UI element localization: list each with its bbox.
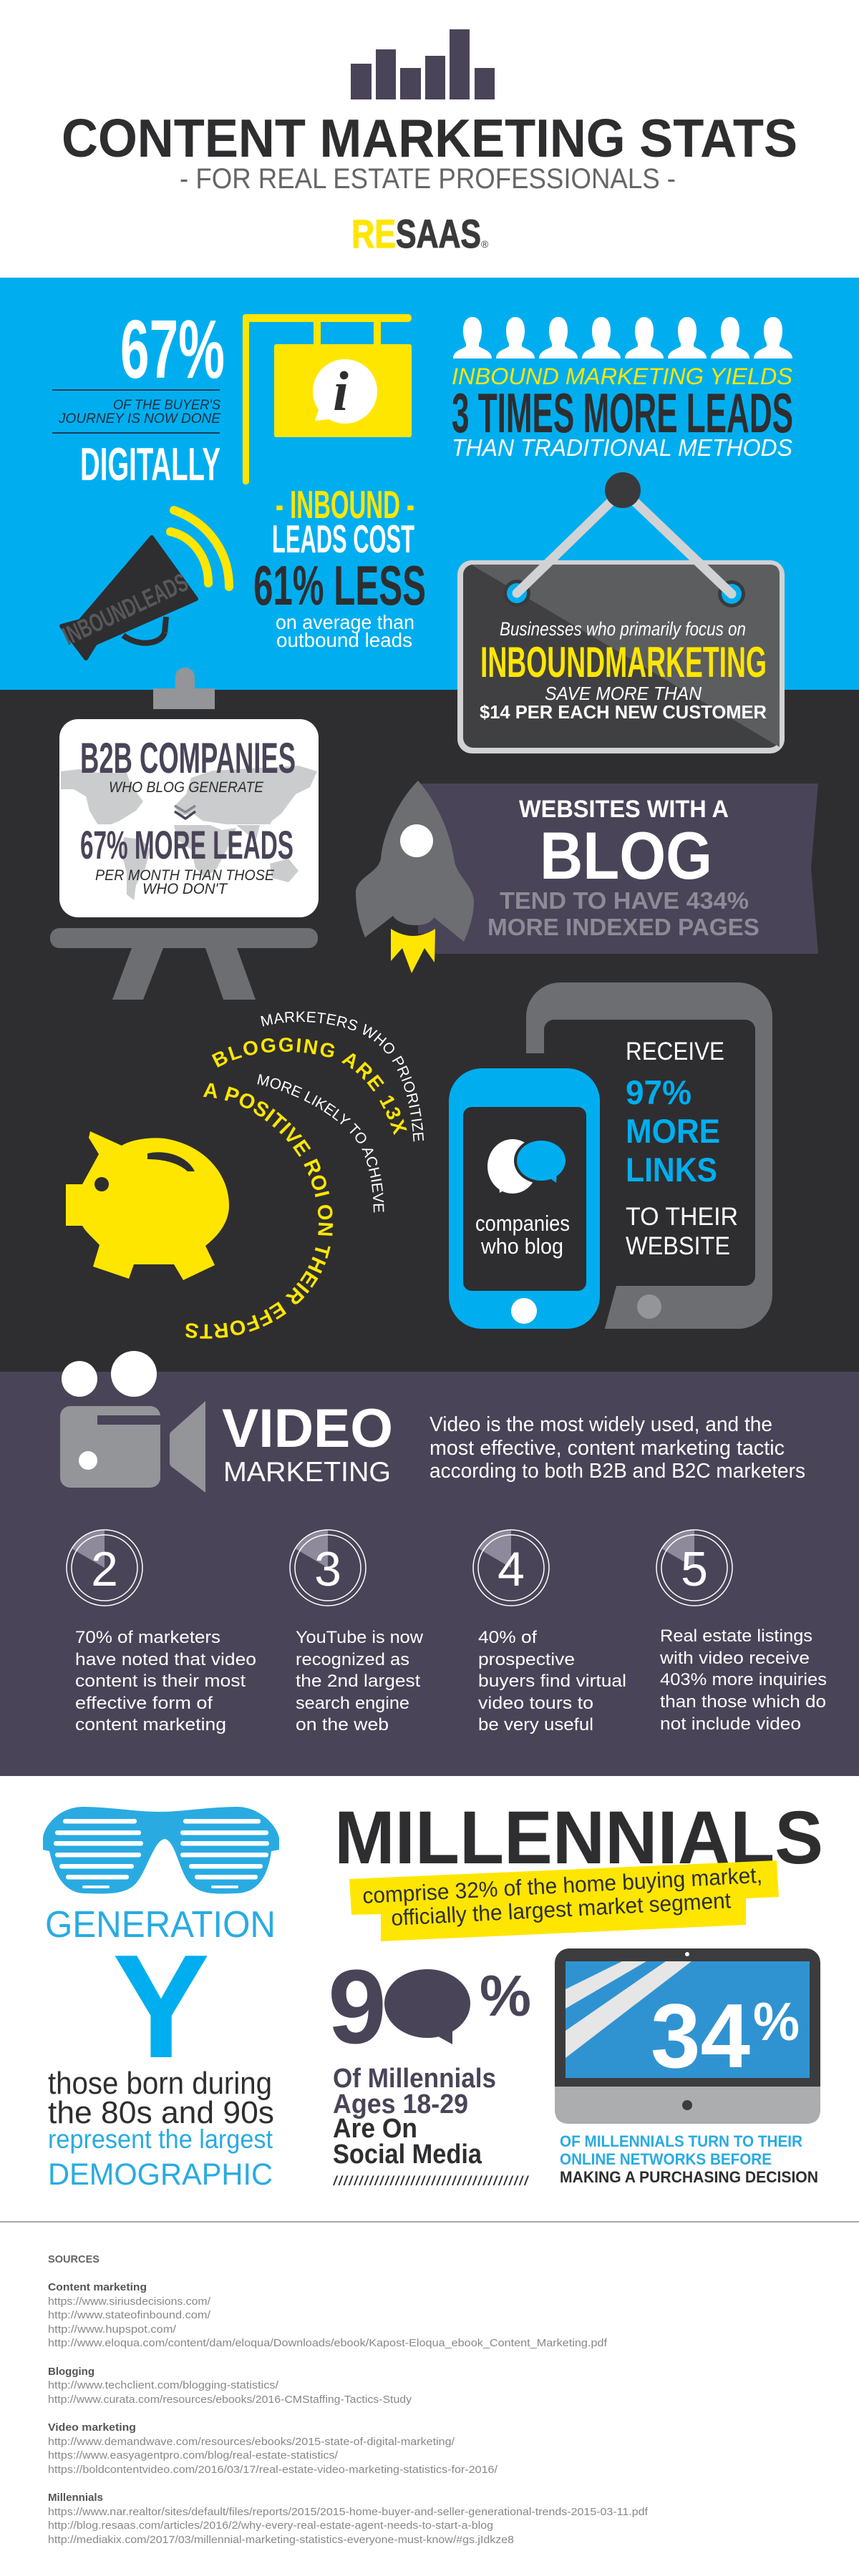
sources: content marketing: http://www.stateofinbound.com/ xyxy=(48,2309,211,2321)
text: b2b companies: B2B COMPANIES xyxy=(80,734,296,782)
countdown: 3: search engine xyxy=(296,1694,409,1713)
text: generation y xyxy=(45,1904,276,2192)
countdown: 2: content marketing xyxy=(75,1715,226,1735)
stat: inbound leads cost 61% less: 61% LESS xyxy=(253,554,426,617)
stat: 67% digitally: JOURNEY IS NOW DONE xyxy=(58,411,220,426)
banner: websites with a blog: BLOG xyxy=(540,818,712,893)
sources: content marketing: http://www.hupspot.com/ xyxy=(48,2323,177,2336)
countdown: 2 xyxy=(67,1530,256,1735)
text: receive 97% more links: WEBSITE xyxy=(626,1232,730,1260)
text: video intro xyxy=(430,1413,805,1483)
logo: RESAAS: SAAS xyxy=(396,211,481,256)
heading: millennials: MILLENNIALS xyxy=(334,1796,823,1880)
sources: millennials: http://blog.resaas.com/articles/2016/2/why-every-real-estate-agent-needs-to-start-a-blog xyxy=(48,2519,493,2532)
countdown: 3: YouTube is now xyxy=(296,1628,424,1647)
text: online networks: ONLINE NETWORKS BEFORE xyxy=(560,2150,772,2168)
countdown: 5 xyxy=(656,1530,827,1734)
countdown: 3: on the web xyxy=(296,1715,389,1735)
stat: 67% digitally: OF THE BUYER'S xyxy=(113,398,220,413)
countdown: 4: prospective xyxy=(478,1650,575,1669)
countdown: 5: with video receive xyxy=(659,1649,810,1668)
sources: video marketing: https://www.easyagentpro.com/blog/real-estate-statistics/ xyxy=(48,2449,339,2462)
countdown: 3: the 2nd largest xyxy=(296,1672,420,1691)
icon: rocket xyxy=(356,781,474,973)
header xyxy=(62,29,797,256)
sources: blogging: http://www.techclient.com/blogging-statistics/ xyxy=(48,2379,279,2391)
icon: desktop monitor xyxy=(555,1948,820,2124)
callout: yellow banner: comprise 32% of the home buying market, xyxy=(362,1863,763,1908)
text: online networks: MAKING A PURCHASING DECISION xyxy=(560,2168,818,2186)
heading: sources: SOURCES xyxy=(48,2253,100,2265)
text: video intro: according to both B2B and B2C marketers xyxy=(430,1460,805,1483)
icon: bar chart xyxy=(351,29,495,99)
text: generation y: those born during xyxy=(48,2066,272,2101)
text: receive 97% more links: MORE xyxy=(626,1112,720,1150)
stat: 3 times more leads: INBOUND MARKETING YIELDS xyxy=(452,364,792,389)
sources: blogging: Blogging xyxy=(48,2366,94,2378)
countdown: 4: 40% of xyxy=(478,1628,537,1647)
hanging sign: inbound marketing: SAVE MORE THAN xyxy=(545,683,702,704)
stat: 90% social media: Ages 18-29 xyxy=(333,2089,468,2119)
icon: megaphone xyxy=(58,510,229,658)
banner: websites with a blog xyxy=(418,784,818,954)
sources: video marketing: https://boldcontentvideo.com/2016/03/17/real-estate-video-marketing-statistics-for-2016/ xyxy=(48,2464,498,2476)
sources: blogging: http://www.curata.com/resources/ebooks/2016-CMStaffing-Tactics-Study xyxy=(48,2394,412,2406)
text: b2b companies: WHO BLOG GENERATE xyxy=(109,779,264,796)
panel: video marketing xyxy=(0,1351,859,1776)
callout: yellow banner xyxy=(349,1860,779,1941)
stat: 90% social media: Of Millennials xyxy=(333,2064,496,2094)
countdown: 4: 4 xyxy=(498,1542,525,1596)
countdown: 5: not include video xyxy=(660,1714,801,1734)
panel: millennials xyxy=(43,1796,823,2192)
text: online networks xyxy=(560,2132,818,2186)
stat: inbound leads cost 61% less: outbound leads xyxy=(276,629,412,651)
icon: desktop monitor: 34 xyxy=(651,1985,750,2087)
panel: content marketing (blue) xyxy=(0,278,859,690)
panel: sources xyxy=(48,2253,649,2546)
heading: video marketing xyxy=(222,1398,393,1488)
sources: content marketing: Content marketing xyxy=(48,2281,147,2293)
text: video intro: most effective, content marketing tactic xyxy=(430,1437,785,1460)
text: b2b companies xyxy=(80,734,296,897)
sources: millennials xyxy=(48,2492,649,2546)
icon: smartphone xyxy=(449,1068,600,1329)
hanging sign: inbound marketing: Businesses who primarily focus on xyxy=(500,618,746,640)
banner: websites with a blog: WEBSITES WITH A xyxy=(519,796,729,823)
countdown: 2: have noted that video xyxy=(75,1650,256,1669)
text: generation y: the 80s and 90s xyxy=(48,2095,274,2130)
stat: 90% social media: Social Media xyxy=(333,2140,482,2170)
stat: 3 times more leads: THAN TRADITIONAL METHODS xyxy=(452,434,792,461)
icon: desktop monitor: % xyxy=(753,1991,800,2051)
sources: blogging xyxy=(48,2366,412,2406)
icon: smartphone: companies xyxy=(475,1211,570,1236)
sources: content marketing: http://www.eloqua.com/content/dam/eloqua/Downloads/ebook/Kapost-Eloqua_ebook_Content_Marketing.pdf xyxy=(48,2337,608,2349)
icon: smartphone: who blog xyxy=(480,1234,563,1259)
countdown: 5: than those which do xyxy=(660,1692,826,1712)
countdown: 5: Real estate listings xyxy=(660,1626,812,1646)
countdown: 2: 2 xyxy=(91,1542,118,1596)
stat: inbound leads cost 61% less: on average than xyxy=(276,611,414,633)
countdown: 2: 70% of marketers xyxy=(75,1628,220,1647)
text: generation y: GENERATION xyxy=(45,1904,276,1946)
text: online networks: OF MILLENNIALS TURN TO THEIR xyxy=(560,2132,802,2150)
text: b2b companies: WHO DON'T xyxy=(142,881,228,897)
countdown: 3: recognized as xyxy=(296,1650,409,1669)
sources: content marketing: https://www.siriusdecisions.com/ xyxy=(48,2296,211,2308)
text: video intro: Video is the most widely used, and the xyxy=(430,1413,772,1436)
icon: video camera xyxy=(60,1351,205,1493)
icon: piggy bank xyxy=(66,1131,229,1280)
icon: tablet xyxy=(523,982,772,1331)
sources: millennials: https://www.nar.realtor/sites/default/files/reports/2015/2015-home-buyer-and-seller-generational-trends-2015-03-11.pdf xyxy=(48,2506,649,2518)
countdown: 2: effective form of xyxy=(75,1694,213,1713)
stat: 67% digitally: 67% xyxy=(120,303,225,396)
curved text: marketers who prioritize blogging: MORE LIKELY TO ACHIEVE xyxy=(257,1074,384,1212)
icon: shutter glasses xyxy=(43,1807,279,1893)
text: receive 97% more links: RECEIVE xyxy=(626,1038,724,1065)
countdown: 4: video tours to xyxy=(478,1694,593,1713)
icon: speech bubbles xyxy=(487,1138,568,1194)
sources: video marketing: Video marketing xyxy=(48,2421,136,2434)
title: CONTENT MARKETING STATS xyxy=(62,108,797,168)
curved text: marketers who prioritize blogging xyxy=(185,1012,424,1339)
stat: 90% social media: ////////////////////////////////////// xyxy=(333,2174,529,2188)
text: generation y: DEMOGRAPHIC xyxy=(48,2157,273,2192)
curved text: marketers who prioritize blogging: MARKETERS WHO PRIORITIZE xyxy=(261,1012,424,1142)
logo: RESAAS: ® xyxy=(481,238,489,250)
text: generation y: represent the largest xyxy=(48,2124,273,2154)
sources: video marketing xyxy=(48,2421,498,2476)
sources: millennials: Millennials xyxy=(48,2492,103,2504)
icon: hanging info sign xyxy=(243,314,412,484)
callout: yellow banner: officially the largest market segment xyxy=(391,1888,732,1931)
banner: websites with a blog: MORE INDEXED PAGES xyxy=(487,914,759,940)
countdown: 2: content is their most xyxy=(75,1672,246,1691)
text: receive 97% more links xyxy=(626,1038,738,1260)
countdown: 5: 403% more inquiries xyxy=(660,1670,827,1689)
banner: websites with a blog: TEND TO HAVE 434% xyxy=(500,887,749,914)
countdown: 4: buyers find virtual xyxy=(478,1672,626,1691)
panel: blogging (dark) xyxy=(0,668,859,1372)
countdown: 3: 3 xyxy=(314,1542,341,1596)
stat: inbound leads cost 61% less xyxy=(253,482,426,651)
stat: 90% social media: % xyxy=(480,1964,531,2029)
curved text: marketers who prioritize blogging: A POSITIVE ROI ON THEIR EFFORTS xyxy=(185,1083,334,1339)
hanging sign: inbound marketing: $14 PER EACH NEW CUSTOMER xyxy=(480,701,767,723)
text: b2b companies: 67% MORE LEADS xyxy=(80,822,293,867)
text: receive 97% more links: TO THEIR xyxy=(626,1203,738,1231)
logo: RESAAS: RE xyxy=(351,211,396,256)
stat: inbound leads cost 61% less: - INBOUND - xyxy=(276,482,414,527)
countdown: 4 xyxy=(473,1530,626,1735)
logo: RESAAS xyxy=(351,211,489,256)
text: receive 97% more links: 97% xyxy=(626,1073,691,1111)
heading: video marketing: VIDEO xyxy=(222,1398,393,1459)
icon: hanging info sign: i xyxy=(333,360,349,422)
countdown: 5: 5 xyxy=(681,1542,708,1596)
curved text: marketers who prioritize blogging: BLOGGING ARE 13X xyxy=(212,1038,407,1135)
heading: video marketing: MARKETING xyxy=(223,1457,391,1488)
text: b2b companies: PER MONTH THAN THOSE xyxy=(95,867,275,884)
countdown: 4: be very useful xyxy=(478,1715,593,1735)
stat: 67% digitally: DIGITALLY xyxy=(80,438,220,490)
subtitle: - FOR REAL ESTATE PROFESSIONALS - xyxy=(180,163,676,195)
icon: row of people xyxy=(453,317,792,358)
illustration: presentation easel xyxy=(50,668,319,1000)
stat: 90% social media: Are On xyxy=(333,2114,417,2144)
stat: 3 times more leads xyxy=(452,364,793,461)
text: generation y: Y xyxy=(112,1924,210,2089)
stat: 67% digitally xyxy=(52,303,225,490)
sources: video marketing: http://www.demandwave.com/resources/ebooks/2015-state-of-digital-marketing/ xyxy=(48,2436,455,2448)
stat: inbound leads cost 61% less: LEADS COST xyxy=(272,517,414,561)
icon: megaphone: INBOUNDLEADS xyxy=(58,567,193,650)
text: receive 97% more links: LINKS xyxy=(626,1151,717,1189)
hanging sign: inbound marketing xyxy=(457,472,785,753)
sources: content marketing xyxy=(48,2281,608,2349)
stat: 90% social media: 9 xyxy=(328,1948,387,2066)
stat: 90% social media xyxy=(328,1948,531,2188)
countdown: 3 xyxy=(290,1530,424,1735)
world map xyxy=(61,766,317,900)
sources: millennials: http://mediakix.com/2017/03/millennial-marketing-statistics-everyone-must-know/#gs.jIdkze8 xyxy=(48,2534,514,2546)
